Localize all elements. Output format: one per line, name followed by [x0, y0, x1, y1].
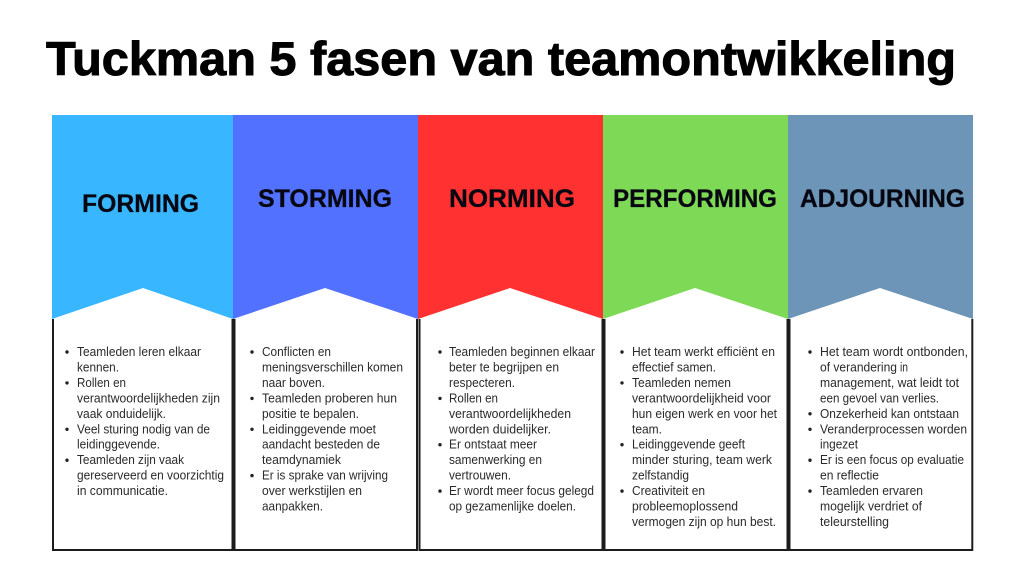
bullet list: storming: Er is sprake van wrijving: [262, 469, 388, 483]
bullet list: storming: naar boven.: [262, 376, 325, 390]
content box: storming: [234, 319, 417, 550]
bullet list: performing: team.: [632, 422, 662, 436]
bullet list: storming: [250, 345, 403, 514]
bullet list: norming: op gezamenlijke doelen.: [449, 500, 576, 514]
panel: performing: [603, 115, 788, 550]
bullet list: forming: [65, 345, 224, 498]
bullet list: adjourning: en reflectie: [820, 469, 879, 483]
bullet list: adjourning: management, wat leidt tot: [820, 376, 960, 390]
panel: adjourning: [788, 115, 973, 550]
bullet list: adjourning: Teamleden ervaren: [820, 484, 923, 498]
bullet list: adjourning: mogelijk verdriet of: [820, 500, 923, 514]
heading: performing: PERFORMING: [613, 185, 777, 213]
bullet list: adjourning: een gevoel van verlies.: [820, 391, 939, 405]
bullet list: storming: positie te bepalen.: [262, 407, 359, 421]
bullet list: performing: hun eigen werk en voor het: [632, 407, 778, 421]
bullet list: norming: Teamleden beginnen elkaar: [449, 345, 595, 359]
bullet list: forming: verantwoordelijkheden zijn: [77, 391, 220, 405]
bullet list: forming: vaak onduidelijk.: [77, 407, 166, 421]
ribbon: norming: [418, 115, 603, 319]
bullet list: adjourning: of verandering: [820, 360, 897, 374]
bullet list: storming: meningsverschillen komen: [262, 360, 403, 374]
bullet list: adjourning: Er is een focus op evaluatie: [820, 453, 964, 467]
bullet list: norming: [438, 345, 595, 514]
bullet list: performing: Teamleden nemen: [632, 376, 731, 390]
bullet list: performing: verantwoordelijkheid voor: [632, 391, 771, 405]
bullet list: storming: Conflicten en: [262, 345, 331, 359]
bullet list: storming: aanpakken.: [262, 500, 323, 514]
bullet list: forming: Rollen en: [77, 376, 126, 390]
bullet list: performing: Het team werkt efficiënt en: [632, 345, 775, 359]
bullet list: norming: Er ontstaat meer: [449, 438, 537, 452]
heading: norming: NORMING: [449, 185, 575, 213]
content box: norming: [420, 319, 602, 550]
bullet list: norming: Er wordt meer focus gelegd: [449, 484, 594, 498]
bullet list: forming: Teamleden leren elkaar: [77, 345, 201, 359]
bullet list: storming: teamdynamiek: [262, 453, 342, 467]
bullet list: storming: aandacht besteden de: [262, 438, 380, 452]
panel: norming: [418, 115, 603, 550]
title: Tuckman 5 fasen van teamontwikkeling: [46, 32, 956, 85]
bullet list: performing: vermogen zijn op hun best.: [632, 515, 776, 529]
bullet list: adjourning: Onzekerheid kan ontstaan: [820, 407, 959, 421]
content box: performing: [604, 319, 788, 550]
heading: storming: STORMING: [258, 185, 392, 213]
panel: storming: [233, 115, 418, 550]
ribbon: performing: [603, 115, 788, 319]
bullet list: norming: beter te begrijpen en: [449, 360, 559, 374]
bullet list: norming: samenwerking en: [449, 453, 542, 467]
bullet list: performing: [620, 345, 778, 529]
ribbon: adjourning: [788, 115, 973, 319]
bullet list: norming: vertrouwen.: [449, 469, 511, 483]
bullet list: forming: kennen.: [77, 360, 119, 374]
bullet list: storming: Leidinggevende moet: [262, 422, 376, 436]
heading: forming: FORMING: [82, 190, 199, 218]
bullet list: forming: Teamleden zijn vaak: [77, 453, 185, 467]
bullet list: adjourning: Veranderprocessen worden: [820, 422, 967, 436]
bullet list: storming: Teamleden proberen hun: [262, 391, 397, 405]
bullet list: storming: over werkstijlen en: [262, 484, 362, 498]
bullet list: adjourning: in: [900, 360, 908, 374]
bullet list: adjourning: ingezet: [820, 438, 858, 452]
bullet list: performing: probleemoplossend: [632, 500, 738, 514]
panel: forming: [52, 115, 233, 550]
bullet list: norming: Rollen en: [449, 391, 498, 405]
bullet list: adjourning: [808, 345, 968, 529]
content box: adjourning: [790, 319, 972, 550]
heading: adjourning: ADJOURNING: [800, 185, 965, 213]
bullet list: forming: leidinggevende.: [77, 438, 160, 452]
bullet list: performing: minder sturing, team werk: [632, 453, 773, 467]
bullet list: forming: Veel sturing nodig van de: [77, 422, 210, 436]
ribbon: forming: [52, 115, 233, 319]
bullet list: norming: verantwoordelijkheden: [449, 407, 571, 421]
bullet list: forming: gereserveerd en voorzichtig: [77, 469, 224, 483]
bullet list: performing: zelfstandig: [632, 469, 689, 483]
bullet list: norming: worden duidelijker.: [448, 422, 551, 436]
ribbon: storming: [233, 115, 418, 319]
bullet list: adjourning: Het team wordt ontbonden,: [820, 345, 968, 359]
content box: forming: [53, 319, 232, 550]
bullet list: adjourning: teleurstelling: [820, 515, 889, 529]
bullet list: performing: Creativiteit en: [632, 484, 705, 498]
bullet list: forming: in communicatie.: [77, 484, 168, 498]
bullet list: performing: Leidinggevende geeft: [632, 438, 745, 452]
bullet list: performing: effectief samen.: [632, 360, 716, 374]
bullet list: norming: respecteren.: [449, 376, 515, 390]
